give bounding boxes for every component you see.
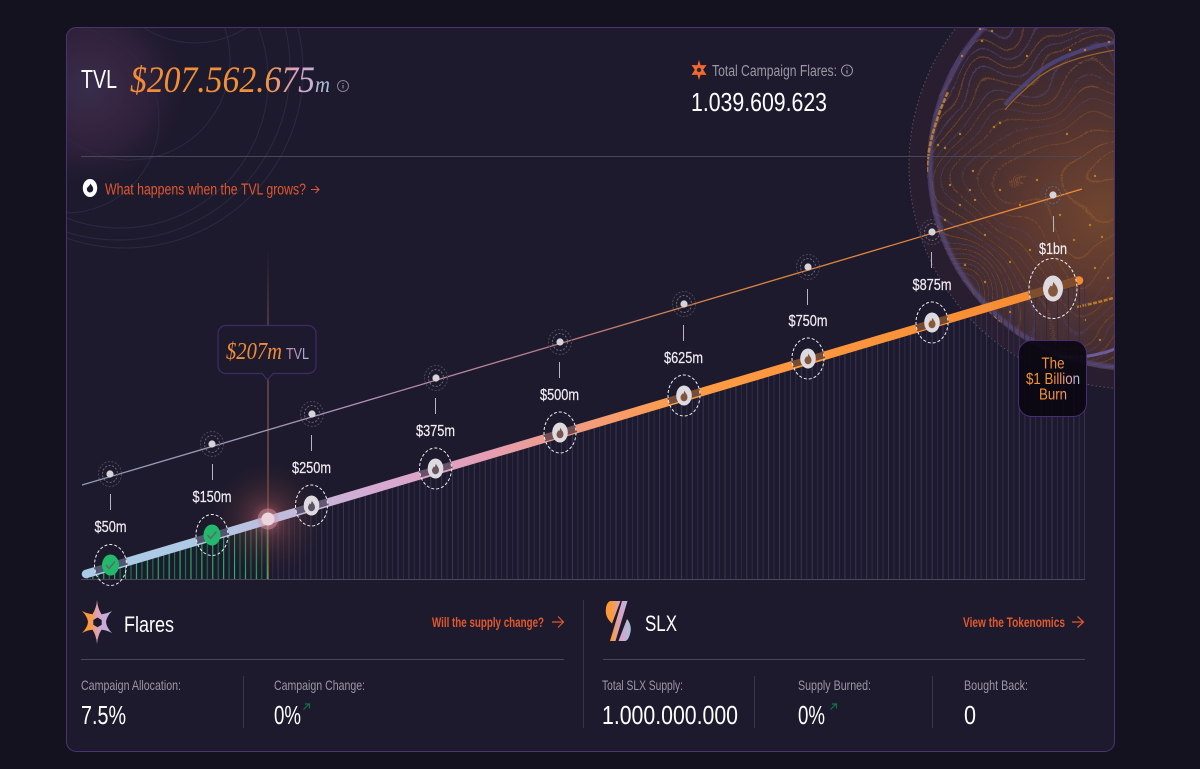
stat: campaign allocation <box>81 677 181 730</box>
stat: total SLX supply: Total SLX Supply: <box>602 677 683 693</box>
milestone: $150m completed <box>196 514 228 556</box>
stat: campaign change <box>274 677 365 730</box>
link: will the supply change: Will the supply change? <box>432 614 544 630</box>
stat: bought back: Bought Back: <box>964 677 1028 693</box>
stat: bought back <box>964 677 1028 730</box>
stat: total SLX supply <box>602 677 738 730</box>
milestone labels: $150m <box>192 489 232 506</box>
milestone: $250m <box>296 485 328 526</box>
glow behind marker <box>208 459 328 579</box>
icon: info <box>842 65 852 76</box>
link: what happens when the TVL grows <box>83 179 319 198</box>
callout: the $1 billion burn: $1 Billion <box>1026 371 1080 388</box>
background rings <box>67 28 304 248</box>
milestone labels: $875m <box>912 277 952 294</box>
milestone: $875m <box>916 302 948 343</box>
stat: total SLX supply: 1.000.000.000 <box>602 702 738 730</box>
icon: flares star <box>82 600 112 644</box>
callout: the $1 billion burn <box>1018 340 1086 416</box>
stat: total campaign flares: 1.039.609.623 <box>691 89 827 117</box>
milestone labels: $625m <box>664 350 703 367</box>
stat: bought back: 0 <box>964 702 976 730</box>
heading: TVL value: m <box>315 72 330 97</box>
planet illustration <box>908 27 1115 389</box>
panel: SLX <box>602 601 1085 730</box>
panel: SLX: SLX <box>645 611 677 636</box>
callout: the $1 billion burn: The <box>1042 356 1065 372</box>
tooltip: current TVL: TVL <box>286 346 309 363</box>
bars: remaining <box>269 279 1085 579</box>
milestone: $750m <box>792 338 824 379</box>
upper milestone markers <box>98 182 1064 486</box>
link: view the tokenomics: View the Tokenomics <box>963 614 1065 630</box>
stat: supply burned: 0% <box>798 702 825 730</box>
bars: reached <box>86 526 268 579</box>
stat: campaign allocation: 7.5% <box>81 702 126 730</box>
milestone: $375m <box>420 448 452 489</box>
heading: TVL value <box>81 60 348 101</box>
milestone labels: $50m <box>94 519 126 536</box>
milestone: $1bn <box>1029 258 1077 318</box>
milestone labels: $750m <box>788 313 828 330</box>
tooltip: current TVL <box>218 326 316 380</box>
milestone: $500m <box>544 412 576 453</box>
icon: flare star <box>692 60 706 80</box>
stat: campaign change: 0% <box>274 702 301 730</box>
milestone labels: $500m <box>540 387 579 404</box>
heading: TVL value: TVL <box>81 64 117 94</box>
thick progress line <box>86 280 1079 574</box>
panel: Flares: Flares <box>124 612 174 637</box>
stat: campaign change: Campaign Change: <box>274 677 365 693</box>
milestone ticks <box>110 216 1054 510</box>
icon: SLX logo <box>606 601 631 641</box>
upper thin line <box>82 189 1082 485</box>
milestone labels <box>94 241 1067 536</box>
chart: TVL growth line <box>81 182 1086 586</box>
milestone: $50m completed <box>94 544 126 586</box>
stat: total campaign flares: Total Campaign Flares: <box>712 63 837 80</box>
stat: campaign allocation: Campaign Allocation: <box>81 677 181 693</box>
icon: info <box>338 80 348 92</box>
milestone labels: $375m <box>416 423 455 440</box>
current TVL vertical marker <box>267 250 269 579</box>
callout: the $1 billion burn: Burn <box>1039 386 1067 404</box>
top-left glow <box>66 28 163 162</box>
current position marker <box>258 508 278 530</box>
stat: supply burned: Supply Burned: <box>798 677 871 693</box>
panel: Flares <box>81 600 564 730</box>
tooltip: current TVL: $207m <box>226 339 282 365</box>
milestone: $625m <box>668 375 700 416</box>
link: what happens when the TVL grows: What happens when the TVL grows? <box>105 182 306 198</box>
milestone labels: $250m <box>292 460 331 477</box>
stat: total campaign flares <box>691 60 852 117</box>
TVL amount: $207.562.675 <box>130 60 315 101</box>
stat: supply burned <box>798 677 871 730</box>
icon: drop ring <box>83 179 97 197</box>
milestone labels: $1bn <box>1039 241 1067 258</box>
